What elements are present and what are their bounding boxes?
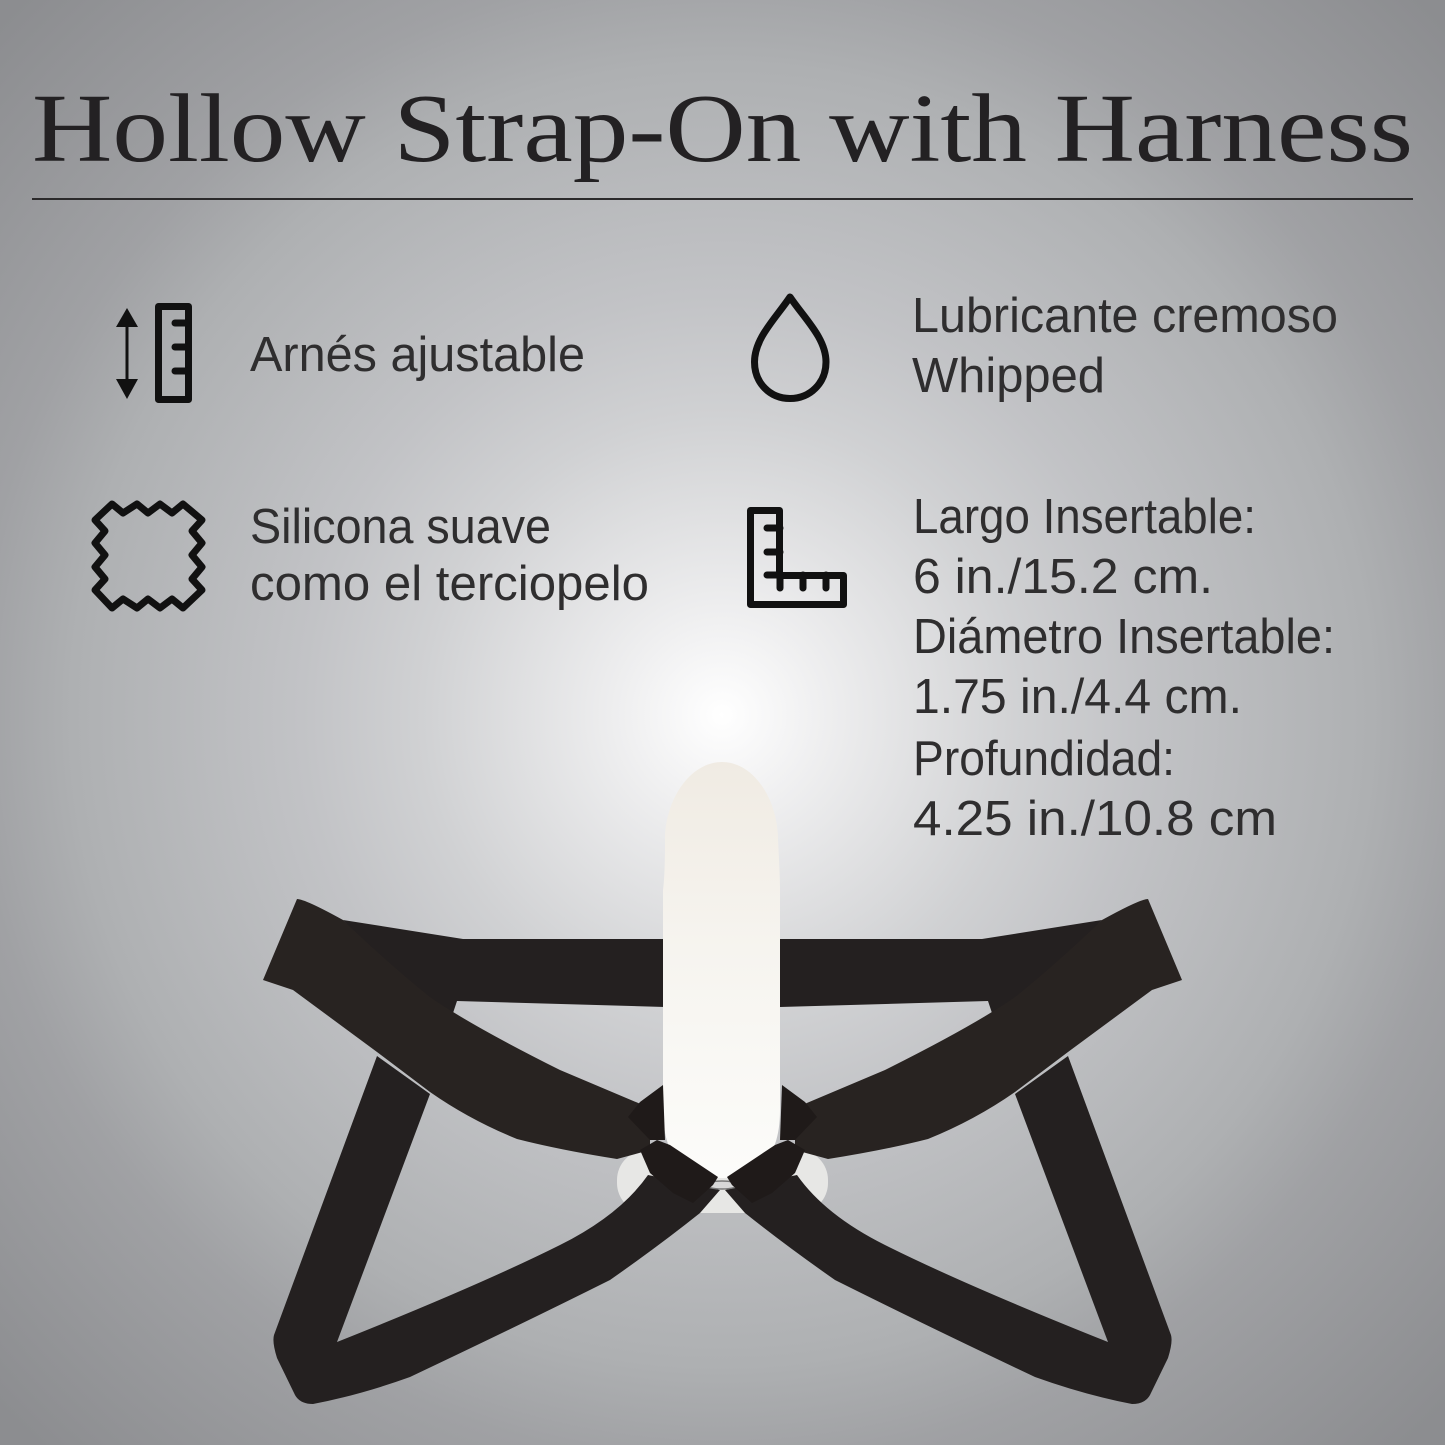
feature: adjustable harness — [116, 306, 585, 400]
harness right side — [725, 899, 1182, 1404]
label: adjustable harness: Arnés ajustable — [250, 328, 585, 382]
icon: height arrow and ruler — [116, 306, 188, 400]
icon: water drop — [754, 297, 826, 398]
label: dimensions list: Diámetro Insertable: — [913, 610, 1335, 664]
label: lubricant: Lubricante cremoso — [912, 289, 1338, 343]
feature: soft silicone — [95, 500, 649, 611]
label: dimensions list: Profundidad: — [913, 732, 1175, 786]
icon: L-square ruler — [750, 510, 844, 604]
label: soft silicone: como el terciopelo — [250, 557, 649, 611]
feature: dimensions — [750, 490, 1349, 846]
label: dimensions list: 1.75 in./4.4 cm. — [913, 670, 1242, 724]
hollow silicone shaft — [663, 762, 780, 1178]
icon: zigzag fabric square — [95, 504, 202, 608]
harness left side — [263, 899, 720, 1404]
silicone base behind straps — [617, 1150, 828, 1213]
label: lubricant: Whipped — [912, 349, 1105, 403]
feature: lubricant — [754, 289, 1338, 403]
label: dimensions list: 4.25 in./10.8 cm — [913, 792, 1277, 846]
label: dimensions list: 6 in./15.2 cm. — [913, 550, 1213, 604]
title: Hollow Strap-On with Harness — [32, 75, 1413, 182]
product photo illustration — [263, 762, 1182, 1404]
label: soft silicone: Silicona suave — [250, 500, 551, 554]
label: dimensions list: Largo Insertable: — [913, 490, 1256, 544]
strap loops and ring — [628, 1085, 817, 1203]
